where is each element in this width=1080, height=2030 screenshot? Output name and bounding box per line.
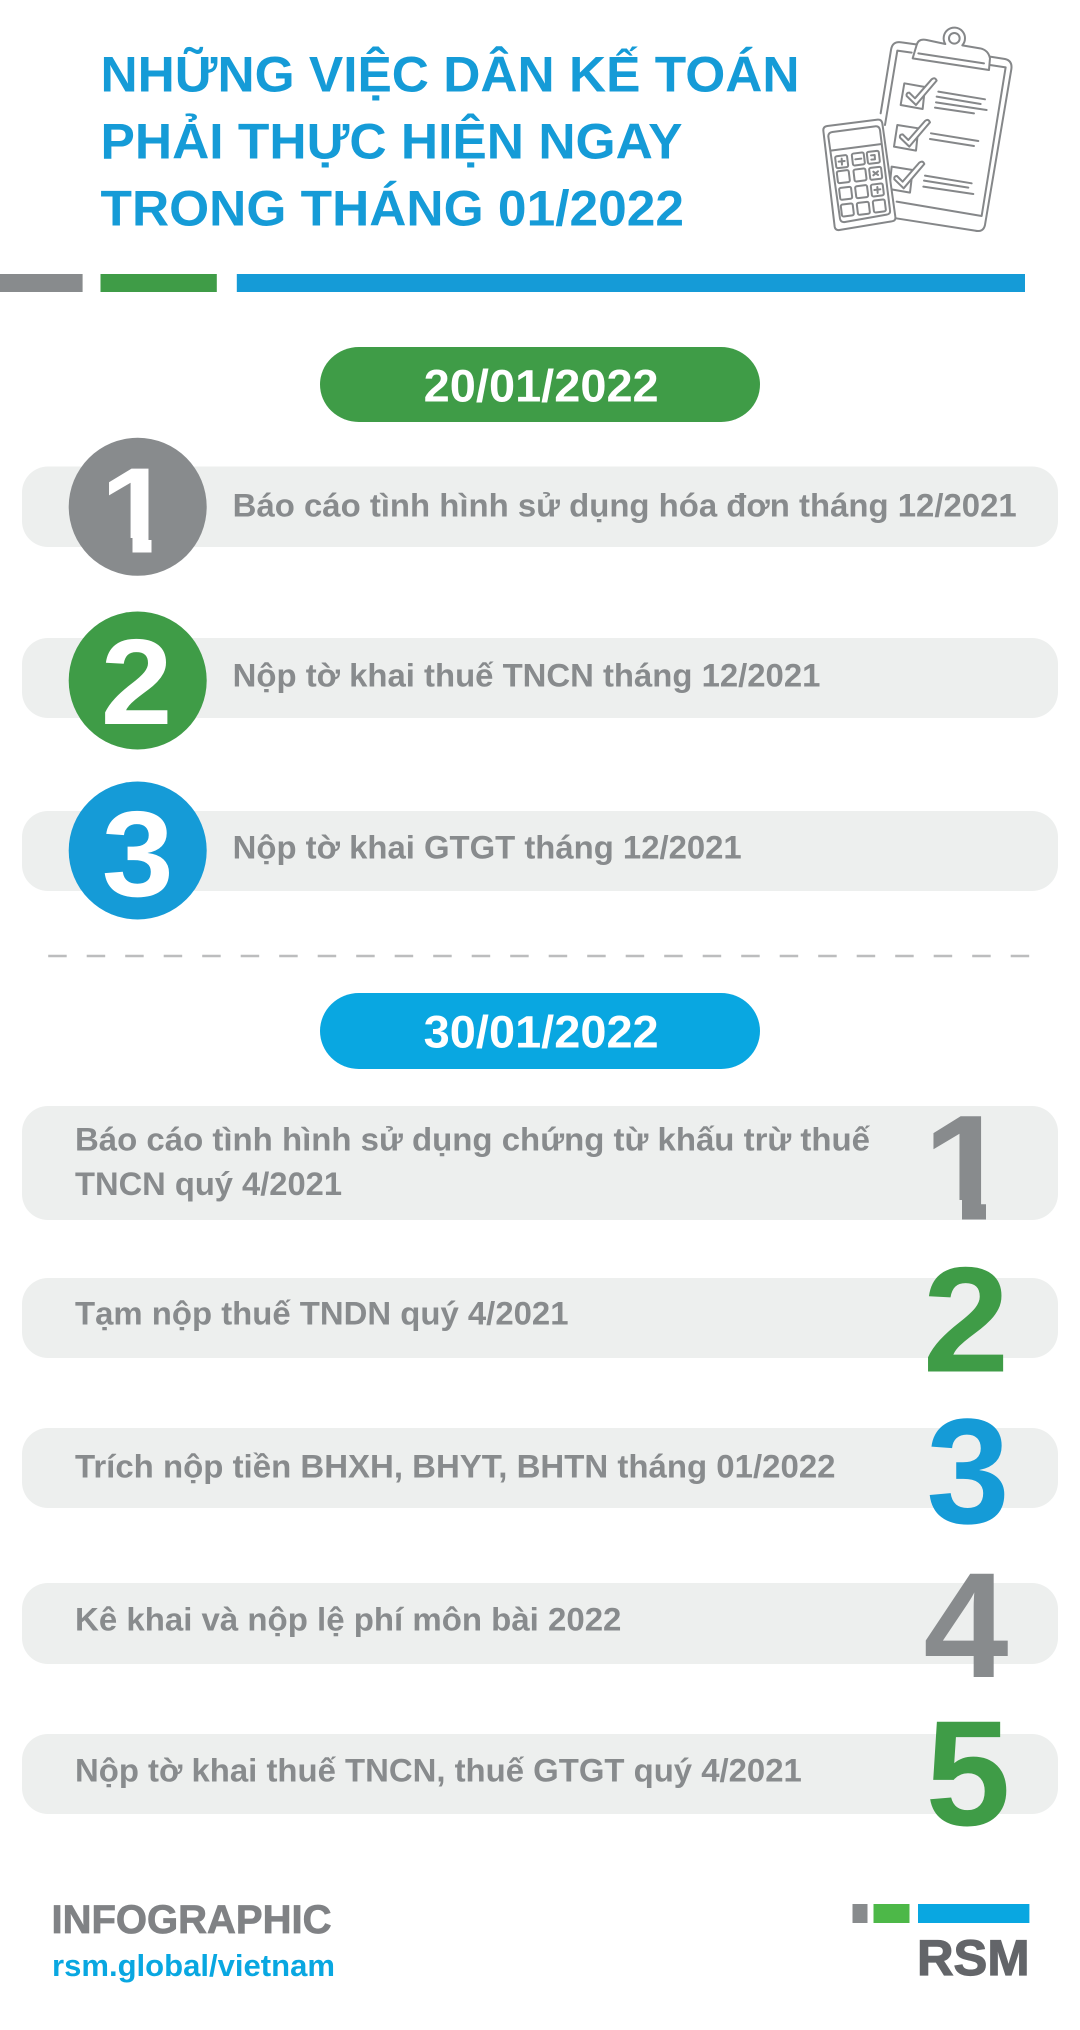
- date pill: 20/01/2022: 20/01/2022: [424, 360, 659, 412]
- task row 2: Nộp tờ khai thuế TNCN tháng 12/2021: [233, 658, 820, 694]
- title: NHỮNG VIỆC DÂN KẾ TOÁN: [100, 46, 800, 102]
- task item 3: [22, 1387, 1058, 1555]
- task item 3: Trích nộp tiền BHXH, BHYT, BHTN tháng 01/2022: [75, 1448, 836, 1484]
- date pill: 20/01/2022: [320, 347, 760, 422]
- task item 2: [22, 1236, 1058, 1404]
- date pill: 30/01/2022: 30/01/2022: [424, 1006, 659, 1058]
- task item 4: 4: [923, 1542, 1009, 1710]
- task row 1: [22, 438, 1058, 579]
- task item 5: [22, 1690, 1058, 1858]
- icon: clipboard and calculator: [823, 28, 1012, 231]
- RSM logo: RSM: [917, 1930, 1030, 1986]
- title: PHẢI THỰC HIỆN NGAY: [100, 112, 682, 170]
- task item 5: 5: [925, 1690, 1011, 1858]
- task item 4: Kê khai và nộp lệ phí môn bài 2022: [75, 1602, 621, 1638]
- task row 2: [22, 612, 1058, 750]
- task item 4: [22, 1542, 1058, 1710]
- footer label: INFOGRAPHIC: [52, 1898, 332, 1942]
- task item 1: TNCN quý 4/2021: [75, 1166, 342, 1202]
- footer label: [52, 1898, 335, 1983]
- task row 3: 3: [102, 785, 174, 922]
- task row 3: [22, 782, 1058, 922]
- task row 3: Nộp tờ khai GTGT tháng 12/2021: [233, 830, 742, 866]
- footer label: rsm.global/vietnam: [52, 1948, 335, 1983]
- task item 2: Tạm nộp thuế TNDN quý 4/2021: [75, 1296, 568, 1332]
- date pill: 30/01/2022: [320, 993, 760, 1069]
- task item 1: 1: [923, 1084, 1010, 1252]
- RSM logo: [852, 1904, 1030, 1986]
- task item 1: [22, 1106, 1058, 1220]
- title: [100, 46, 800, 236]
- title: TRONG THÁNG 01/2022: [100, 180, 684, 236]
- header colour bars: [0, 274, 1025, 292]
- task item 1: Báo cáo tình hình sử dụng chứng từ khấu trừ thuế: [75, 1122, 870, 1158]
- task row 1: 1: [100, 442, 173, 579]
- task item 5: Nộp tờ khai thuế TNCN, thuế GTGT quý 4/2021: [75, 1752, 802, 1788]
- task row 1: Báo cáo tình hình sử dụng hóa đơn tháng 12/2021: [233, 488, 1017, 524]
- task item 3: 3: [926, 1387, 1010, 1555]
- task item 2: 2: [923, 1236, 1009, 1404]
- task row 2: 2: [101, 613, 173, 750]
